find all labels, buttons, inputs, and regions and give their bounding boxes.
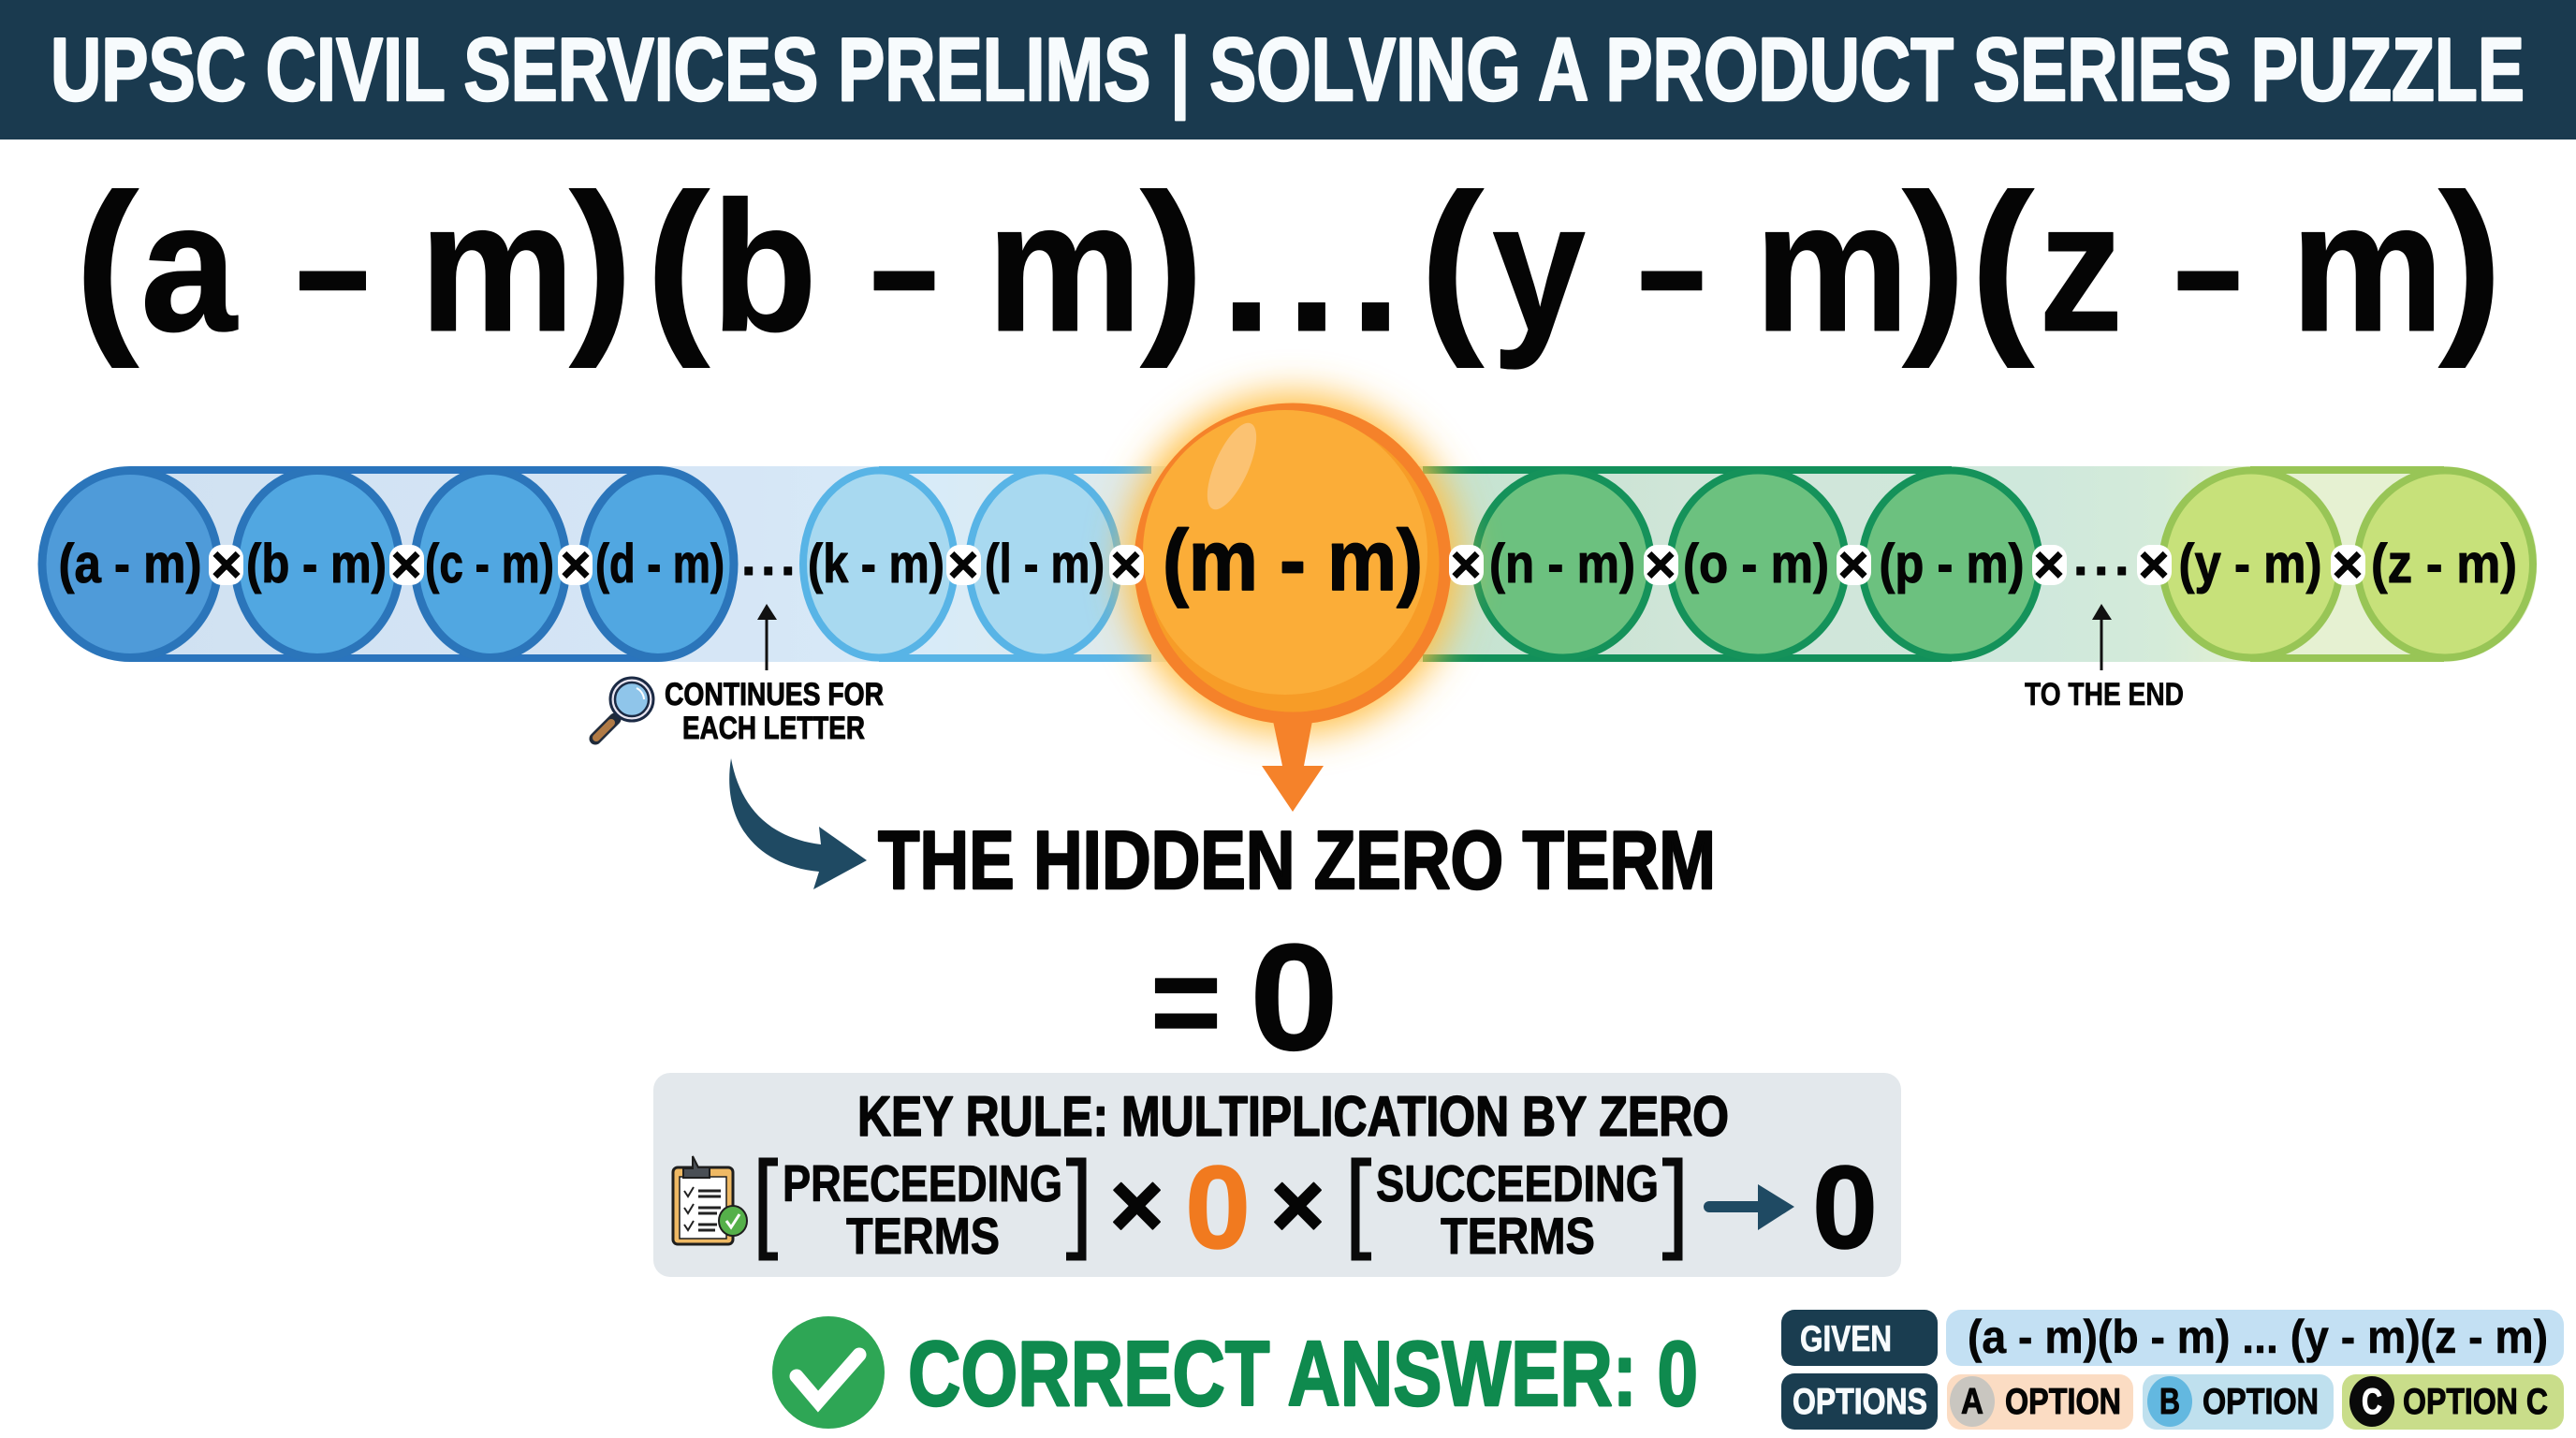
main formula: m — [2291, 163, 2444, 370]
main formula: z — [2039, 163, 2123, 370]
option a — [1947, 1374, 2133, 1430]
multiplication signs: × — [1451, 535, 1481, 594]
succeeding terms group: SUCCEEDING — [1376, 1154, 1659, 1212]
note: continues for each letter — [665, 677, 884, 746]
main formula: y — [1492, 163, 1586, 370]
main formula: ) — [569, 154, 633, 369]
option c: OPTION C — [2403, 1382, 2548, 1422]
note: to the end: TO THE END — [2025, 677, 2184, 712]
option a: A — [1961, 1382, 1983, 1422]
result zero: 0 — [1812, 1143, 1878, 1273]
main formula: ( — [75, 154, 139, 369]
result: equals zero: = — [1150, 928, 1222, 1075]
term labels: (a - m) — [58, 534, 202, 594]
succeeding terms group — [1355, 1154, 1678, 1265]
option c: C — [2362, 1382, 2382, 1422]
multiplication signs: × — [391, 535, 421, 594]
main formula: ( — [1420, 154, 1485, 369]
main formula: ) — [1140, 154, 1204, 369]
term labels: (z - m) — [2371, 534, 2517, 594]
times sign: × — [1110, 1153, 1164, 1256]
preceding terms group — [763, 1154, 1082, 1265]
main formula — [75, 154, 2502, 370]
option a: OPTION — [2005, 1382, 2121, 1422]
highlighted zero term: (m - m) — [1163, 513, 1423, 609]
times sign: × — [1271, 1153, 1325, 1256]
term labels: (y - m) — [2179, 534, 2321, 594]
preceding terms group: TERMS — [846, 1207, 1000, 1265]
icon: clipboard — [673, 1156, 747, 1244]
main formula: – — [2174, 163, 2242, 370]
term labels — [58, 534, 2517, 594]
arrow: to the end — [2092, 604, 2112, 670]
orange zero: 0 — [1185, 1143, 1251, 1273]
note: continues for each letter: CONTINUES FOR — [665, 677, 884, 712]
term labels: (l - m) — [985, 534, 1105, 594]
preceding terms group: PRECEEDING — [783, 1154, 1062, 1212]
highlighted zero term — [1124, 393, 1461, 812]
term labels: (o - m) — [1683, 534, 1829, 594]
term circles: y and z — [2162, 470, 2533, 657]
term labels: (d - m) — [595, 534, 724, 594]
result: equals zero: 0 — [1250, 913, 1339, 1082]
icon: magnifying glass — [595, 678, 653, 739]
arrow to result — [1709, 1184, 1794, 1230]
succeeding terms group: TERMS — [1441, 1207, 1595, 1265]
term labels: (n - m) — [1489, 534, 1635, 594]
term circles: n to p — [1475, 470, 2040, 657]
main formula: m — [419, 163, 575, 370]
panel: key rule — [653, 1073, 1901, 1277]
panel: given: (a - m)(b - m) ... (y - m)(z - m) — [1968, 1311, 2548, 1363]
ellipsis before y: ... — [2073, 527, 2130, 586]
option b — [2143, 1374, 2334, 1430]
multiplication signs: × — [948, 535, 978, 594]
main formula: ( — [646, 154, 710, 369]
panel: options — [1781, 1373, 2564, 1430]
ellipsis after d: ... — [741, 527, 796, 586]
arrow: continues — [757, 604, 777, 670]
multiplication signs: × — [1838, 535, 1868, 594]
main formula: – — [1638, 163, 1705, 370]
result: equals zero — [1150, 913, 1339, 1082]
multiplication signs: × — [2139, 535, 2169, 594]
pointer arrow — [1262, 721, 1324, 812]
main formula: ( — [1970, 154, 2035, 369]
main formula: m — [987, 163, 1142, 370]
main formula: ) — [2438, 154, 2502, 369]
correct answer: CORRECT ANSWER: 0 — [908, 1322, 1698, 1425]
multiplication signs: × — [1646, 535, 1676, 594]
main formula: – — [871, 163, 938, 370]
term labels: (c - m) — [425, 534, 554, 594]
main formula: b — [711, 163, 817, 370]
main formula: a — [140, 163, 239, 370]
panel: given: GIVEN — [1800, 1319, 1892, 1359]
main formula: – — [296, 163, 370, 370]
multiplication signs — [209, 535, 2365, 594]
option c — [2342, 1374, 2564, 1430]
multiplication signs: × — [2333, 535, 2363, 594]
curved arrow — [729, 758, 867, 889]
term labels: (p - m) — [1880, 534, 2024, 594]
main formula: m — [1754, 163, 1910, 370]
term labels: (k - m) — [808, 534, 944, 594]
multiplication signs: × — [2034, 535, 2064, 594]
multiplication signs: × — [561, 535, 591, 594]
panel: options: OPTIONS — [1793, 1382, 1927, 1422]
option b: OPTION — [2203, 1382, 2319, 1422]
key rule heading: KEY RULE: MULTIPLICATION BY ZERO — [857, 1085, 1729, 1148]
heading: hidden zero term: THE HIDDEN ZERO TERM — [878, 814, 1716, 906]
multiplication signs: × — [212, 535, 242, 594]
term labels: (b - m) — [246, 534, 387, 594]
product chain band — [40, 466, 2537, 662]
main formula: ) — [1902, 154, 1966, 369]
option b: B — [2159, 1382, 2180, 1422]
note: continues for each letter: EACH LETTER — [682, 711, 865, 746]
icon: green check — [772, 1316, 885, 1429]
multiplication signs: × — [1111, 535, 1141, 594]
main formula: ... — [1221, 163, 1401, 370]
term circles: a to d — [42, 470, 734, 657]
term circles: k and l — [803, 470, 1119, 657]
